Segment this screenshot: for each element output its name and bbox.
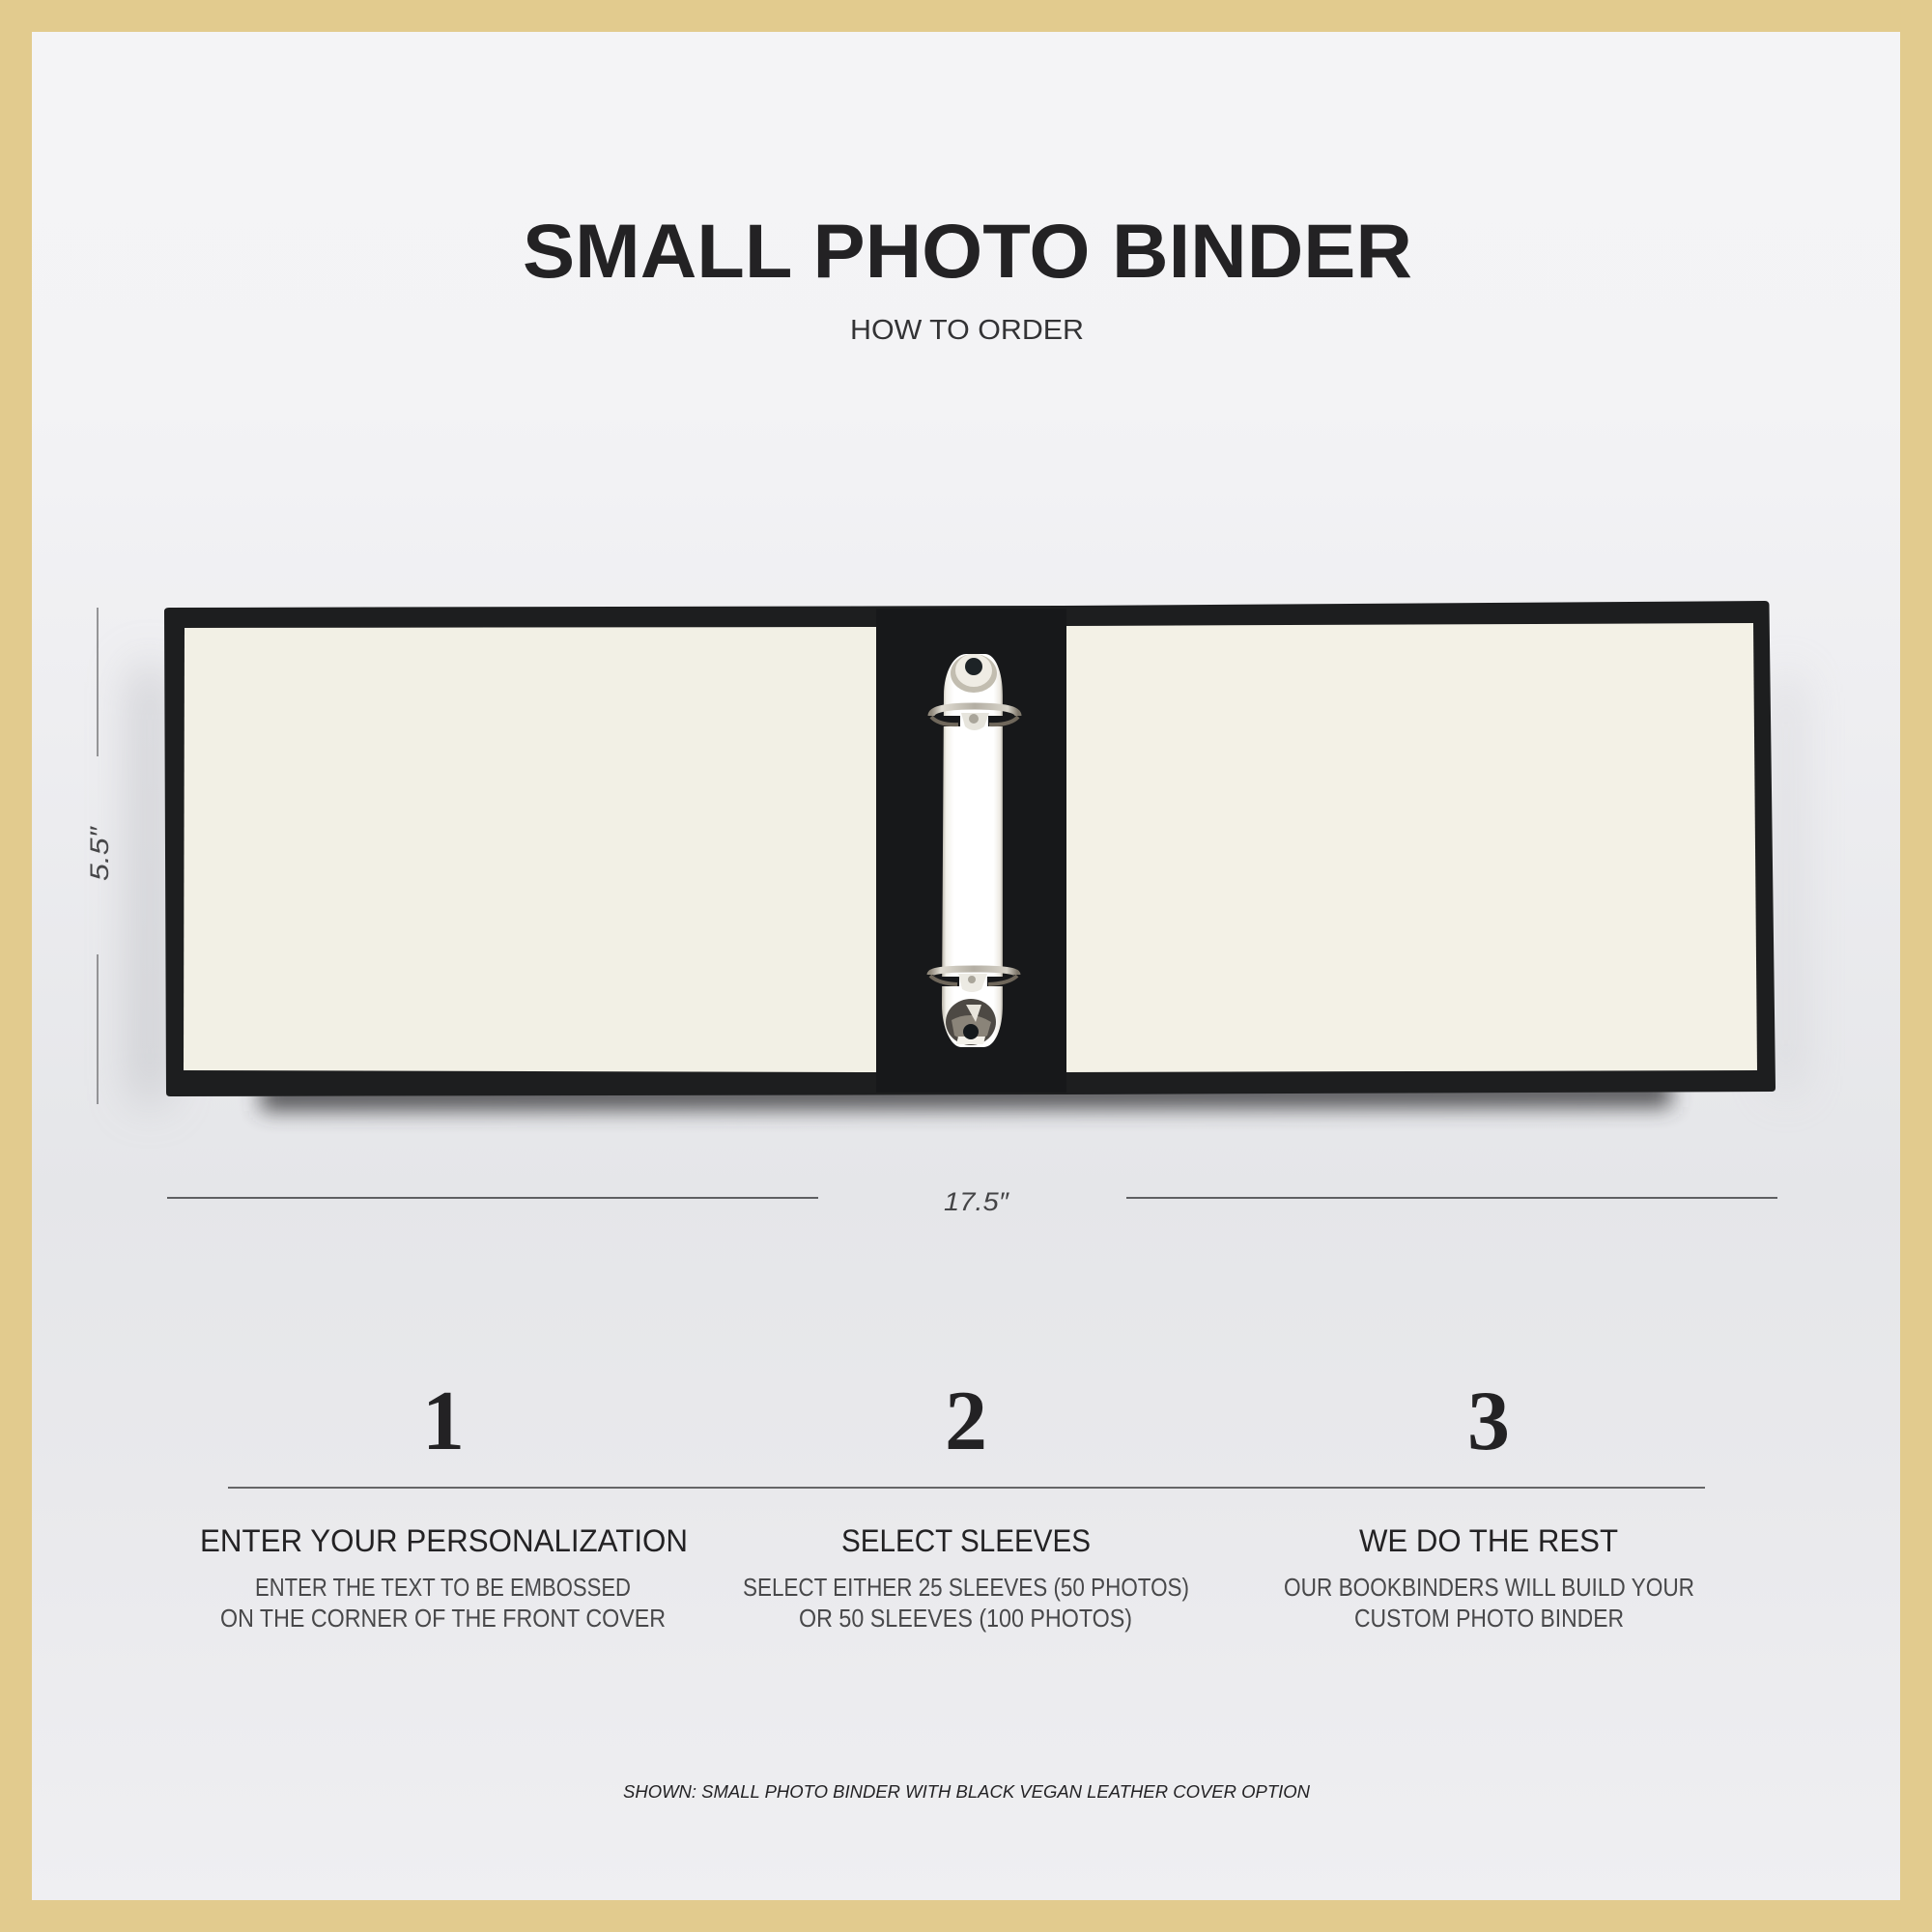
step 3 text bbox=[1284, 1523, 1694, 1633]
step 3 text: OUR BOOKBINDERS WILL BUILD YOUR bbox=[1284, 1573, 1694, 1602]
step 2 text: SELECT SLEEVES bbox=[841, 1523, 1091, 1558]
number 3: 3 bbox=[1467, 1375, 1510, 1468]
step 2 text bbox=[743, 1523, 1189, 1633]
footnote: SHOWN: SMALL PHOTO BINDER WITH BLACK VEGAN LEATHER COVER OPTION bbox=[623, 1781, 1311, 1802]
binder cover bbox=[164, 601, 1776, 1096]
step 1 text: ENTER THE TEXT TO BE EMBOSSED bbox=[255, 1573, 631, 1602]
spine bbox=[876, 609, 1066, 1093]
step 2 text: SELECT EITHER 25 SLEEVES (50 PHOTOS) bbox=[743, 1573, 1189, 1602]
number 1: 1 bbox=[422, 1375, 465, 1468]
metal tube bbox=[942, 654, 1003, 1047]
top ring bbox=[931, 706, 1018, 730]
step 1 text: ON THE CORNER OF THE FRONT COVER bbox=[220, 1604, 666, 1633]
open binder bbox=[164, 601, 1776, 1096]
step numbers bbox=[422, 1375, 1510, 1468]
ring mechanism bbox=[930, 654, 1018, 1047]
subtitle: HOW TO ORDER bbox=[850, 315, 1084, 346]
bottom ring bbox=[930, 969, 1017, 992]
width dimension: 17.5 inches: 17.5″ bbox=[944, 1187, 1010, 1216]
step 2 text: OR 50 SLEEVES (100 PHOTOS) bbox=[799, 1604, 1132, 1633]
bottom rivet bbox=[946, 999, 996, 1045]
step 3 text: CUSTOM PHOTO BINDER bbox=[1354, 1604, 1624, 1633]
step 1 text bbox=[200, 1523, 688, 1633]
number 2: 2 bbox=[945, 1375, 987, 1468]
step 3 text: WE DO THE REST bbox=[1359, 1523, 1618, 1558]
step 1 text: ENTER YOUR PERSONALIZATION bbox=[200, 1523, 688, 1558]
left page bbox=[184, 627, 876, 1072]
title: SMALL PHOTO BINDER bbox=[523, 208, 1412, 294]
steps divider bbox=[228, 1487, 1705, 1489]
top rivet bbox=[951, 654, 997, 693]
right page bbox=[1066, 623, 1757, 1072]
height dimension: 5.5 inches: 5.5″ bbox=[85, 825, 114, 881]
binder shadow bbox=[135, 667, 1797, 1111]
